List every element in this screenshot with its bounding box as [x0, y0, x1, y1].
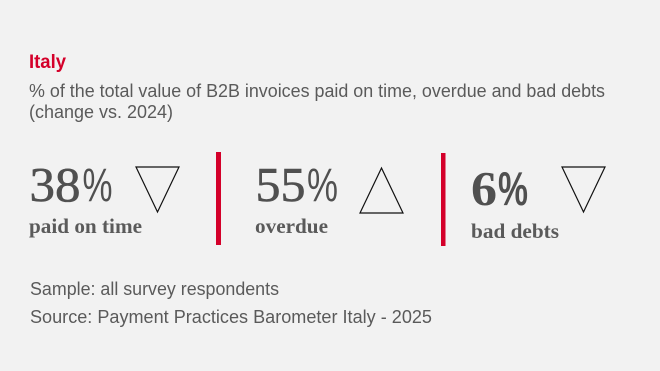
subtitle: (change vs. 2024) [29, 102, 173, 122]
divider 2 [441, 153, 446, 246]
subtitle [29, 81, 605, 122]
footer note [30, 279, 432, 327]
footer note: Sample: all survey respondents [30, 279, 279, 299]
stat: overdue: overdue [255, 214, 328, 238]
stat: bad debts [471, 161, 605, 243]
icon: down triangle [562, 167, 605, 212]
stat: paid on time: 38 [30, 157, 80, 212]
stat: overdue: % [307, 158, 338, 211]
stat: bad debts: 6 [471, 161, 497, 216]
footer note: Source: Payment Practices Barometer Italy - 2025 [30, 307, 432, 327]
stat: paid on time: % [82, 158, 112, 211]
title: Italy [29, 52, 66, 73]
divider 1 [216, 152, 221, 245]
icon: up triangle [360, 168, 403, 213]
icon: down triangle [136, 167, 179, 212]
stat: paid on time: paid on time [29, 214, 142, 238]
stat: paid on time [29, 157, 179, 238]
subtitle: % of the total value of B2B invoices paid on time, overdue and bad debts [29, 81, 605, 101]
stat: overdue [255, 157, 403, 238]
stat: overdue: 55 [256, 157, 306, 212]
stat: bad debts: % [498, 162, 528, 215]
stat: bad debts: bad debts [471, 219, 559, 243]
